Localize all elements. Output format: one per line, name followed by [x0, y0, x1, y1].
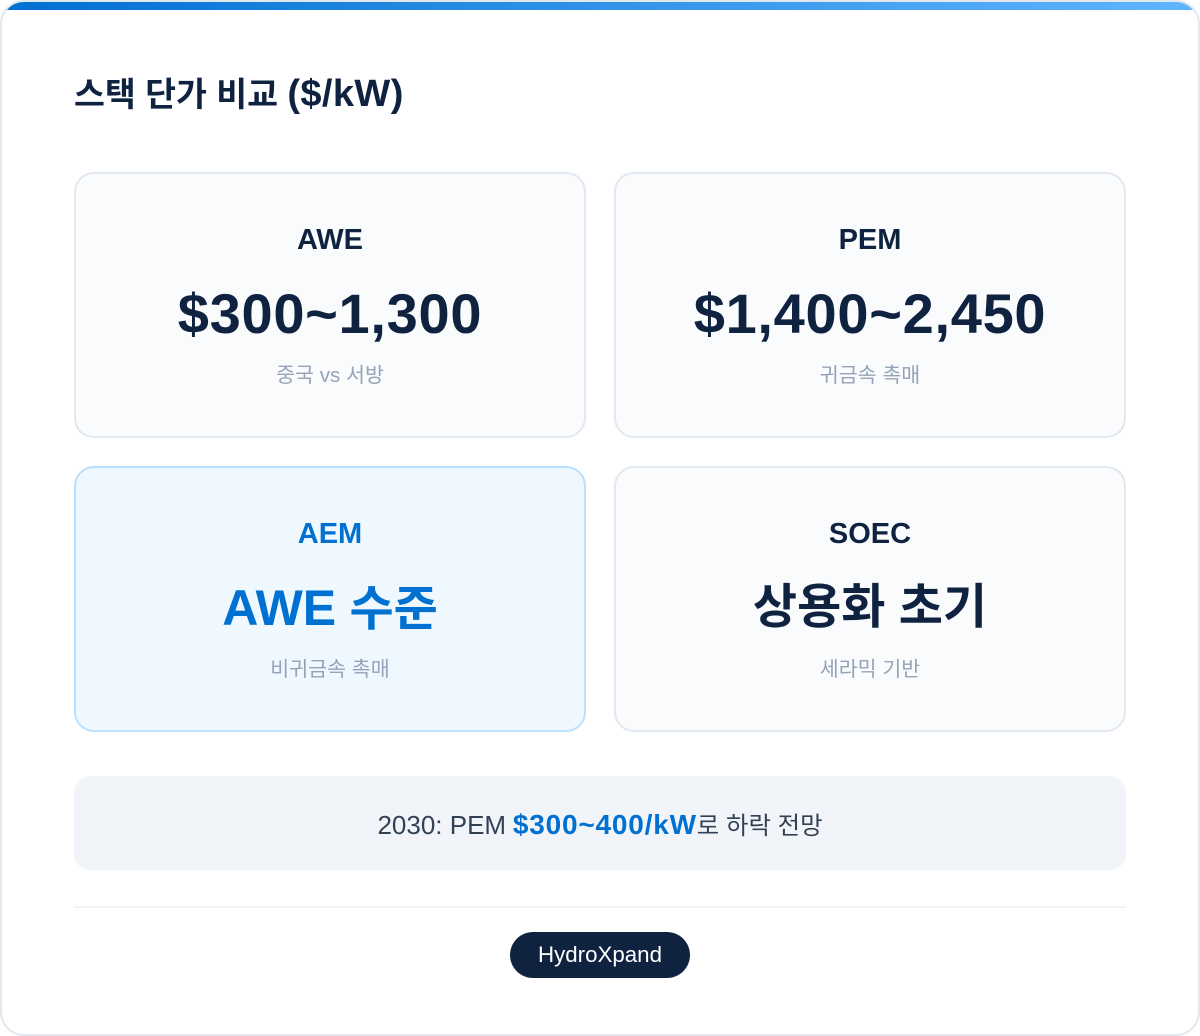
SOEC value: 상용화 초기 — [753, 581, 987, 634]
SOEC note: 세라믹 기반 — [820, 658, 920, 681]
title: 스택 단가 비교 ($/kW) — [74, 73, 404, 115]
panel: AEM highlighted — [74, 466, 586, 732]
brand badge: HydroXpand — [538, 942, 662, 967]
panel: AWE — [74, 172, 586, 438]
PEM value: $1,400~2,450 — [694, 282, 1046, 345]
brand badge — [510, 932, 690, 978]
top gradient bar — [2, 2, 1198, 10]
panel: SOEC — [614, 466, 1126, 732]
AWE value: $300~1,300 — [178, 282, 482, 345]
panel: PEM — [614, 172, 1126, 438]
AEM value: AWE 수준 — [222, 580, 438, 636]
AEM label: AEM — [298, 518, 362, 550]
AEM note: 비귀금속 촉매 — [270, 658, 390, 681]
callout: 2030 outlook: 2030: PEM $300~400/kW로 하락 전망 — [377, 809, 823, 840]
PEM note: 귀금속 촉매 — [820, 364, 920, 387]
PEM label: PEM — [839, 224, 901, 256]
AWE note: 중국 vs 서방 — [276, 364, 384, 387]
AWE label: AWE — [297, 224, 363, 256]
SOEC label: SOEC — [829, 518, 911, 550]
